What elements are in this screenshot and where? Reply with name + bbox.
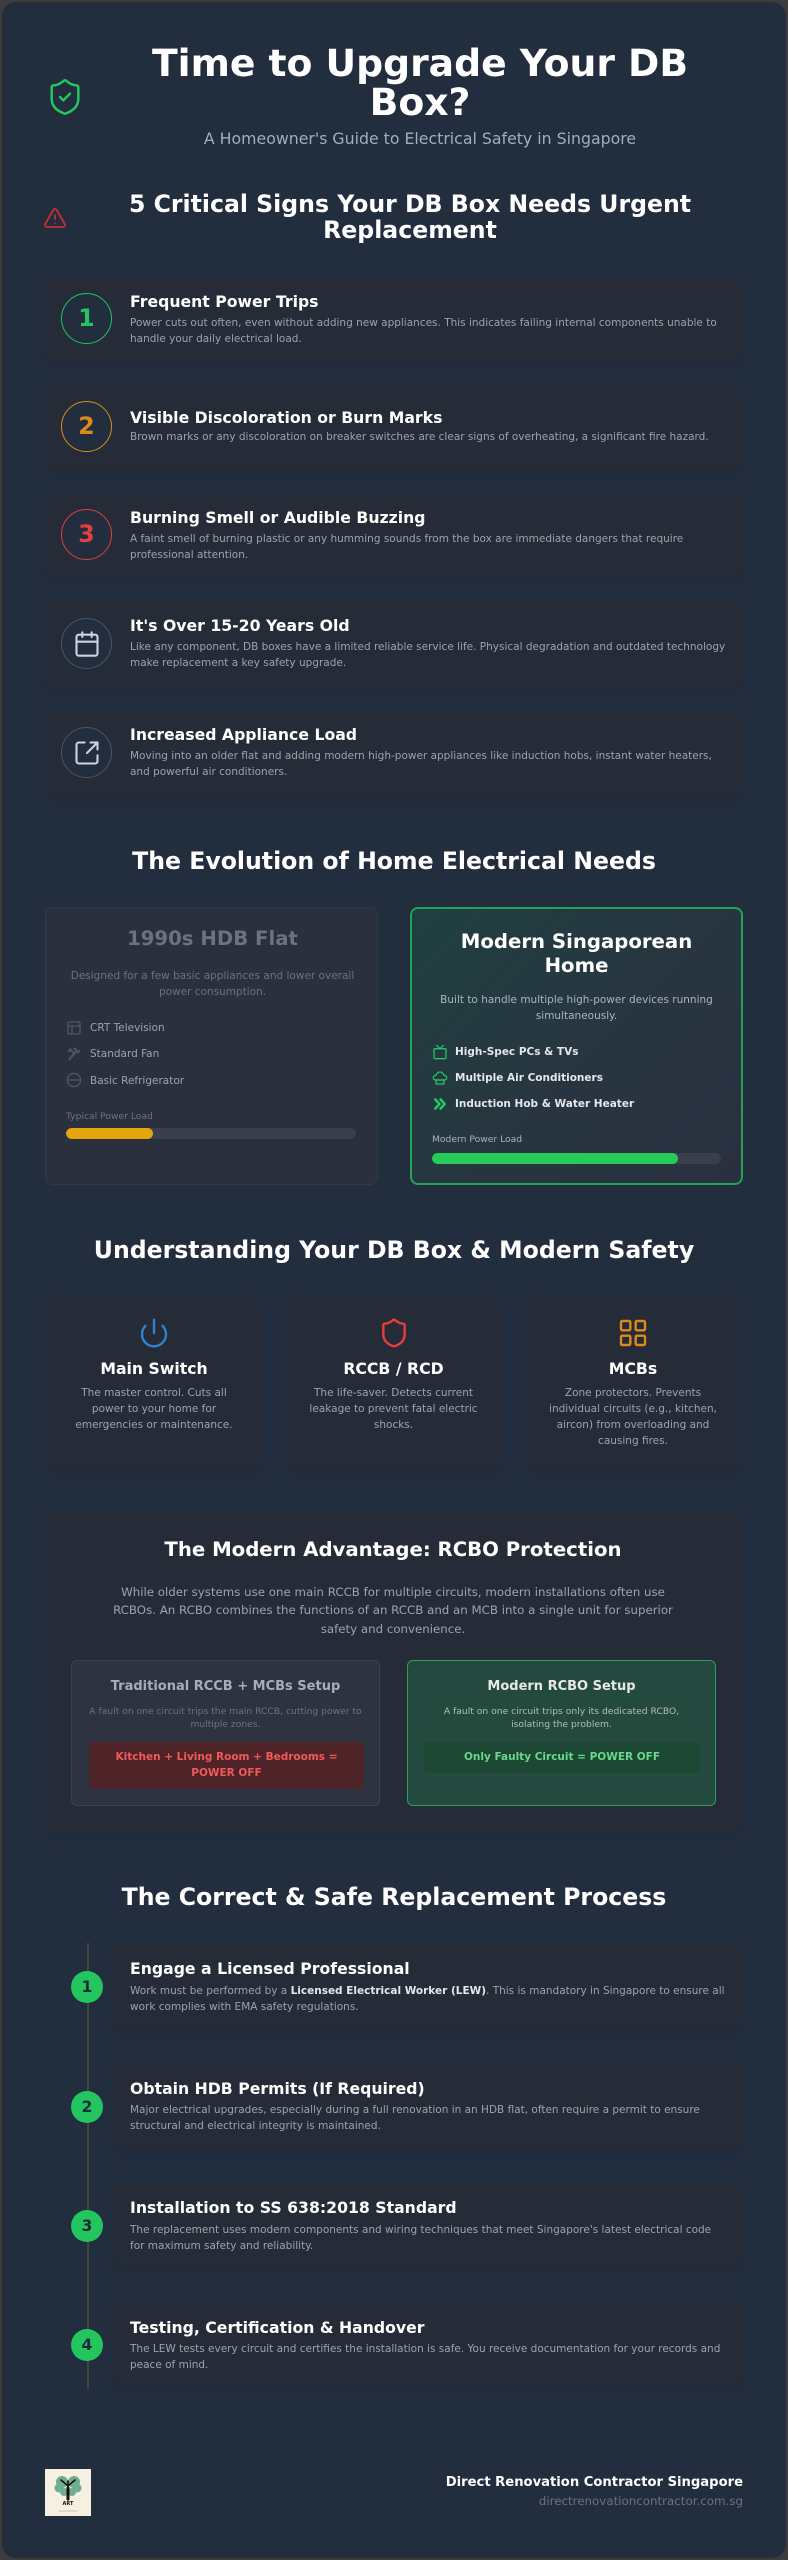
1990s description: [71, 970, 354, 998]
main switch description: [75, 1387, 233, 1431]
modern setup description: A fault on one circuit trips only its dedicated RCBO,: [444, 1706, 679, 1717]
icon: power: [140, 1318, 168, 1348]
main switch description: emergencies or maintenance.: [75, 1419, 233, 1431]
step 2 description: Major electrical upgrades, especially during a full renovation in an HDB flat, often require a permit to ensure: [130, 2104, 700, 2116]
RCCB description: The life-saver. Detects current: [314, 1387, 473, 1399]
badge: step 4: 4: [82, 2335, 92, 2354]
icon: television: [67, 1021, 81, 1035]
step 4 title: Testing, Certification & Handover: [130, 2318, 424, 2337]
MCBs description: individual circuits (e.g., kitchen,: [549, 1403, 717, 1415]
logo wordmark: ART: [63, 2501, 73, 2507]
step 3 description: [130, 2224, 711, 2252]
panel: sign 1: [46, 277, 742, 363]
step 3 title: Installation to SS 638:2018 Standard: [130, 2198, 457, 2217]
sign 1 description: Power cuts out often, even without adding new appliances. This indicates failing internal components unable to: [130, 317, 717, 329]
icon: grid: [620, 1320, 646, 1346]
title: Box?: [370, 80, 470, 124]
icon: double chevron: [434, 1098, 446, 1110]
logo: [45, 2469, 91, 2516]
step 1 description: Work must be performed by a Licensed Electrical Worker (LEW). This is mandatory in Singapore to ensure all: [130, 1985, 725, 1997]
icon: shield check: [50, 79, 80, 115]
main switch title: Main Switch: [100, 1359, 208, 1378]
RCBO paragraph: [113, 1585, 673, 1636]
list: old appliances: [66, 1021, 184, 1088]
bar: modern power load: [432, 1153, 721, 1164]
sign 2 description: Brown marks or any discoloration on breaker switches are clear signs of overheating, a significant fire hazard.: [130, 431, 709, 443]
section heading: critical signs: Replacement: [323, 216, 497, 244]
label: Basic Refrigerator: Basic Refrigerator: [90, 1075, 184, 1087]
step 2 description: structural and electrical integrity is maintained.: [130, 2120, 381, 2132]
panel: step 3 card: [114, 2183, 742, 2268]
sign 3 description: [130, 533, 683, 561]
RCCB description: leakage to prevent fatal electric: [309, 1403, 478, 1415]
RCBO paragraph: While older systems use one main RCCB for multiple circuits, modern installations often use: [121, 1585, 665, 1599]
MCBs description: [549, 1387, 717, 1447]
step 4 description: peace of mind.: [130, 2359, 208, 2371]
panel: sign 3: [46, 492, 742, 579]
panel: RCBO protection: [47, 1513, 741, 1832]
section heading: understanding: Understanding Your DB Box & Modern Safety: [94, 1236, 694, 1264]
result: power off everywhere: POWER OFF: [191, 1767, 262, 1779]
sign 3 description: A faint smell of burning plastic or any humming sounds from the box are immediate dangers that require: [130, 533, 683, 545]
panel: step 4 card: [114, 2303, 742, 2388]
label: CRT Television: CRT Television: [90, 1022, 165, 1034]
icon: fan: [68, 1048, 80, 1060]
modern title: Modern Singaporean: [461, 930, 692, 953]
panel: modern home: [410, 907, 743, 1185]
RCCB description: shocks.: [374, 1419, 413, 1431]
subtitle: A Homeowner's Guide to Electrical Safety in Singapore: [204, 129, 636, 148]
traditional description: multiple zones.: [190, 1719, 261, 1730]
modern setup description: [444, 1706, 679, 1730]
sign 1 description: [130, 317, 717, 345]
result: power off everywhere: Kitchen + Living Room + Bedrooms =: [116, 1751, 338, 1763]
sign 3 title: Burning Smell or Audible Buzzing: [130, 508, 426, 527]
section heading: critical signs: [129, 190, 691, 244]
badge 3: 3: [78, 520, 95, 548]
panel: step 2 card: [114, 2063, 742, 2149]
sign 5 title: Increased Appliance Load: [130, 725, 357, 744]
icon: shield: [382, 1318, 406, 1348]
badge 3: [61, 509, 112, 560]
MCBs title: MCBs: [609, 1359, 657, 1378]
step 1 description: [130, 1985, 725, 2013]
step 2 title: Obtain HDB Permits (If Required): [130, 2079, 425, 2098]
badge: step 4: [71, 2329, 103, 2361]
sign 1 description: handle your daily electrical load.: [130, 333, 302, 345]
result: only faulty circuit off: [424, 1742, 700, 1773]
icon: tv: [433, 1044, 447, 1060]
1990s title: 1990s HDB Flat: [127, 927, 298, 950]
icon: air conditioner: [432, 1071, 448, 1085]
modern description: simultaneously.: [536, 1010, 617, 1022]
RCBO title: The Modern Advantage: RCBO Protection: [164, 1538, 622, 1561]
MCBs description: aircon) from overloading and: [557, 1419, 709, 1431]
panel: sign 4: [46, 602, 742, 688]
step 3 description: The replacement uses modern components and wiring techniques that meet Singapore's latest electrical code: [130, 2224, 711, 2236]
badge: step 3: 3: [82, 2216, 92, 2235]
step 4 description: The LEW tests every circuit and certifies the installation is safe. You receive documentation for your records and: [130, 2343, 720, 2355]
main switch description: The master control. Cuts all: [81, 1387, 227, 1399]
badge: step 2: [71, 2091, 103, 2123]
sign 2 title: Visible Discoloration or Burn Marks: [130, 408, 442, 427]
result: power off everywhere: [89, 1742, 364, 1789]
badge: step 1: [71, 1971, 103, 2003]
label: modern power load: Modern Power Load: [432, 1134, 522, 1145]
modern setup description: isolating the problem.: [511, 1719, 612, 1730]
timeline line: [87, 1943, 89, 2388]
badge: load: [61, 727, 112, 778]
sign 5 description: [130, 750, 712, 778]
sign 3 description: professional attention.: [130, 549, 248, 561]
sign 4 description: Like any component, DB boxes have a limited reliable service life. Physical degradation and outdated technology: [130, 641, 725, 653]
icon: calendar: [75, 631, 99, 657]
icon: refrigerator: [66, 1072, 82, 1088]
bar: typical power load: [66, 1128, 356, 1139]
badge: calendar: [61, 618, 112, 669]
badge 2: 2: [78, 412, 95, 440]
icon: arrow out of square: [75, 741, 99, 764]
step 4 description: [130, 2343, 720, 2371]
traditional title: Traditional RCCB + MCBs Setup: [111, 1679, 340, 1694]
MCBs description: causing fires.: [598, 1435, 668, 1447]
badge: step 2: 2: [82, 2097, 92, 2116]
panel: RCCB: [286, 1297, 501, 1470]
list: modern appliances: [432, 1044, 634, 1110]
panel: main switch: [47, 1297, 261, 1470]
traditional description: [89, 1706, 362, 1730]
step 3 description: for maximum safety and reliability.: [130, 2240, 313, 2252]
panel: sign 5: [46, 710, 742, 797]
step 2 description: [130, 2104, 700, 2132]
1990s description: Designed for a few basic appliances and lower overall: [71, 970, 354, 982]
RCCB title: RCCB / RCD: [343, 1359, 444, 1378]
badge: step 3: [71, 2210, 103, 2242]
modern description: Built to handle multiple high-power devices running: [440, 994, 713, 1006]
section heading: evolution: The Evolution of Home Electrical Needs: [132, 847, 656, 875]
label: Induction Hob & Water Heater: Induction Hob & Water Heater: [455, 1098, 634, 1110]
title: [152, 41, 688, 124]
section heading: process: The Correct & Safe Replacement Process: [122, 1883, 666, 1911]
company name: Direct Renovation Contractor Singapore: [446, 2475, 743, 2490]
sign 5 description: and powerful air conditioners.: [130, 766, 287, 778]
RCBO paragraph: RCBOs. An RCBO combines the functions of an RCCB and an MCB into a single unit for superior: [113, 1603, 673, 1617]
step 1 title: Engage a Licensed Professional: [130, 1959, 410, 1978]
section heading: critical signs: 5 Critical Signs Your DB Box Needs Urgent: [129, 190, 691, 218]
badge 1: [61, 293, 112, 344]
main switch description: power to your home for: [92, 1403, 216, 1415]
badge: step 1: 1: [82, 1977, 92, 1996]
modern description: [440, 994, 713, 1022]
panel: sign 2: [46, 386, 742, 470]
RCCB description: [309, 1387, 478, 1431]
title: Time to Upgrade Your DB: [152, 41, 688, 85]
RCBO paragraph: safety and convenience.: [321, 1622, 465, 1636]
panel: traditional setup: [71, 1660, 380, 1806]
sign 5 description: Moving into an older flat and adding modern high-power appliances like induction hobs, instant water heaters,: [130, 750, 712, 762]
label: Standard Fan: Standard Fan: [90, 1048, 159, 1060]
badge 2: [61, 401, 112, 452]
panel: MCBs: [526, 1297, 740, 1470]
panel: 1990s flat: [45, 907, 378, 1185]
1990s description: power consumption.: [159, 986, 266, 998]
sign 4 description: make replacement a key safety upgrade.: [130, 657, 346, 669]
panel: modern setup: [407, 1660, 716, 1806]
panel: step 1 card: [114, 1943, 742, 2029]
icon: warning triangle: [44, 208, 66, 228]
modern title: [461, 930, 692, 976]
sign 1 title: Frequent Power Trips: [130, 292, 319, 311]
step 1 description: work complies with EMA safety regulations.: [130, 2001, 359, 2013]
company URL: directrenovationcontractor.com.sg: [539, 2494, 743, 2508]
result: only faulty circuit off: Only Faulty Circuit = POWER OFF: [464, 1751, 660, 1763]
traditional description: A fault on one circuit trips the main RCCB, cutting power to: [89, 1706, 362, 1717]
label: High-Spec PCs & TVs: High-Spec PCs & TVs: [455, 1046, 578, 1058]
label: Multiple Air Conditioners: Multiple Air Conditioners: [455, 1072, 603, 1084]
sign 4 title: It's Over 15-20 Years Old: [130, 616, 350, 635]
badge 1: 1: [78, 304, 95, 332]
MCBs description: Zone protectors. Prevents: [565, 1387, 701, 1399]
label: typical power load: Typical Power Load: [66, 1111, 153, 1122]
footer company: [446, 2475, 743, 2508]
sign 4 description: [130, 641, 725, 669]
modern setup title: Modern RCBO Setup: [487, 1679, 636, 1694]
modern title: Home: [545, 954, 608, 976]
